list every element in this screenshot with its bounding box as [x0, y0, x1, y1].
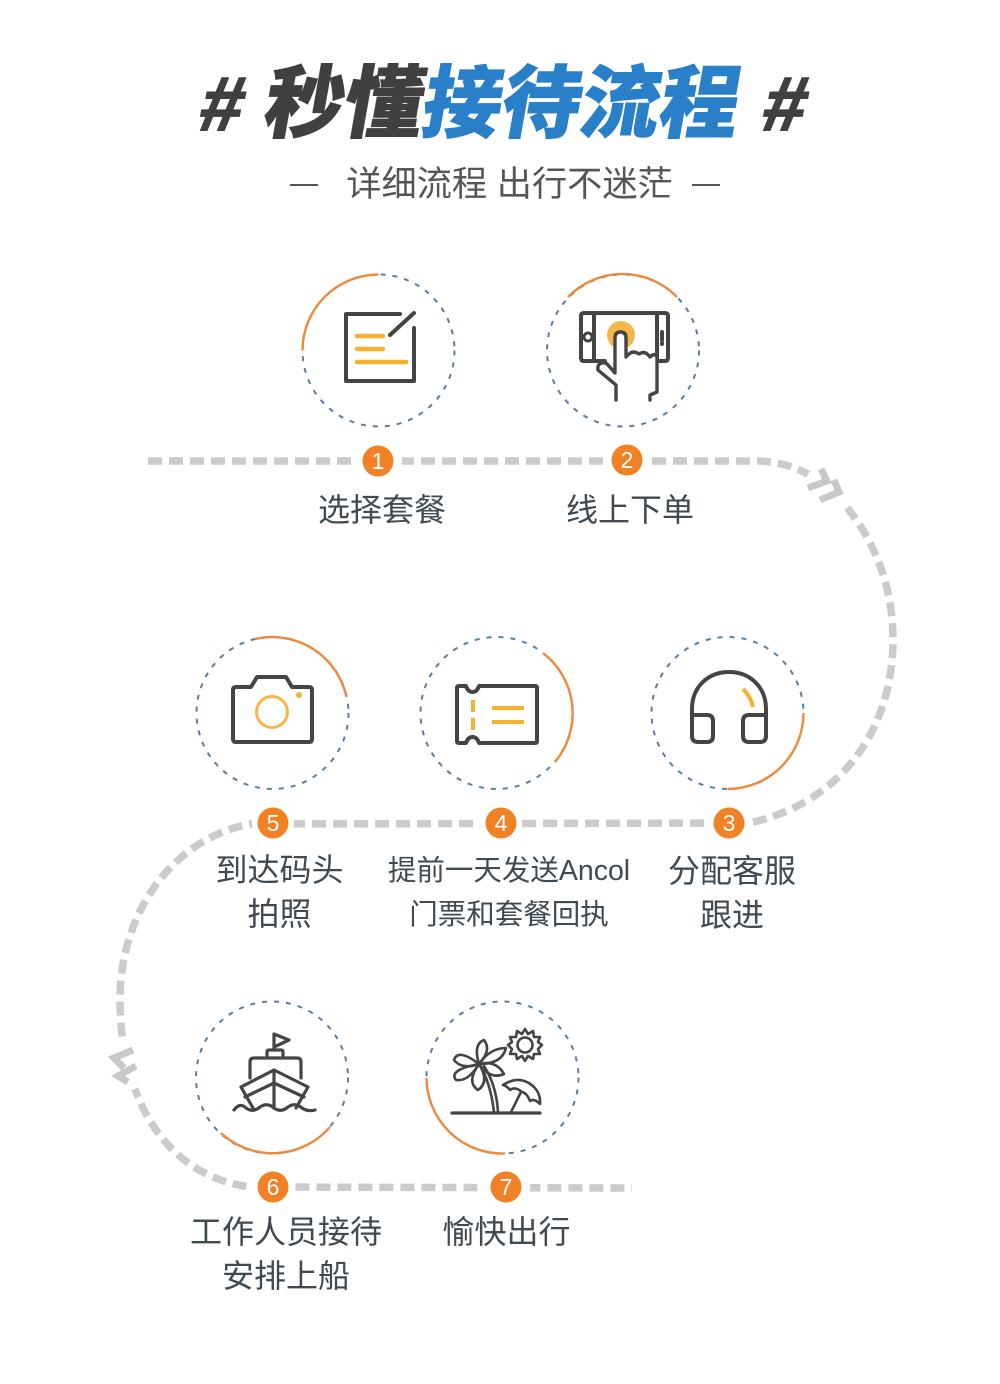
- icon ring 2: [547, 274, 699, 426]
- label 6: 工作人员接待: [190, 1214, 382, 1250]
- icon ring 3: [652, 637, 804, 789]
- icon ring 7: [426, 1002, 578, 1154]
- title: #: [757, 63, 815, 147]
- label 3: 跟进: [700, 897, 764, 933]
- icon: ship: [234, 1034, 315, 1111]
- badge 7: 7: [500, 1174, 512, 1200]
- icon: camera: [233, 677, 312, 742]
- badge 2: 2: [621, 447, 633, 473]
- label 1: 选择套餐: [318, 492, 446, 528]
- label 4: 提前一天发送Ancol: [388, 855, 630, 887]
- label 7: 愉快出行: [442, 1214, 571, 1250]
- label 6: 安排上船: [222, 1258, 350, 1294]
- step 7: enjoy the trip: [426, 1002, 578, 1250]
- icon: ticket: [457, 686, 537, 743]
- badge 4: 4: [495, 810, 508, 836]
- icon: hand tapping phone: [581, 313, 668, 400]
- badge 4: [480, 802, 522, 844]
- badge 7: [482, 1163, 530, 1211]
- badge 3: [708, 802, 750, 844]
- badge 2: [603, 436, 651, 484]
- icon ring 4: [420, 637, 573, 789]
- step 4: send tickets: [388, 637, 630, 931]
- badge 5: [252, 802, 294, 844]
- badge 5: 5: [267, 810, 279, 836]
- step 3: assign customer service: [652, 637, 804, 933]
- badge 1: [354, 437, 402, 485]
- title: #: [194, 63, 252, 147]
- label 4: 门票和套餐回执: [409, 899, 609, 931]
- icon: document and pen: [346, 313, 414, 381]
- badge 6: [252, 1166, 294, 1208]
- icon: headphones: [692, 672, 766, 742]
- step 1: select package: [302, 274, 454, 528]
- step 2: order online: [547, 274, 699, 528]
- badge 1: 1: [372, 448, 384, 474]
- step 6: staff reception and boarding: [190, 1002, 382, 1294]
- icon ring 6: [196, 1002, 348, 1154]
- badge 3: 3: [723, 810, 735, 836]
- title: 秒懂接待流程: [258, 60, 748, 148]
- subtitle: 详细流程 出行不迷茫: [346, 165, 673, 204]
- badge 6: 6: [267, 1174, 279, 1200]
- icon: palm tree, sun and umbrella: [452, 1029, 542, 1113]
- icon ring 5: [196, 637, 348, 789]
- label 2: 线上下单: [566, 492, 694, 528]
- label 5: 拍照: [247, 896, 312, 932]
- icon ring 1: [302, 274, 454, 426]
- label 5: 到达码头: [215, 852, 344, 888]
- step 5: arrive and take photo: [196, 637, 348, 932]
- label 3: 分配客服: [668, 853, 796, 889]
- dashed route path: [100, 461, 893, 1188]
